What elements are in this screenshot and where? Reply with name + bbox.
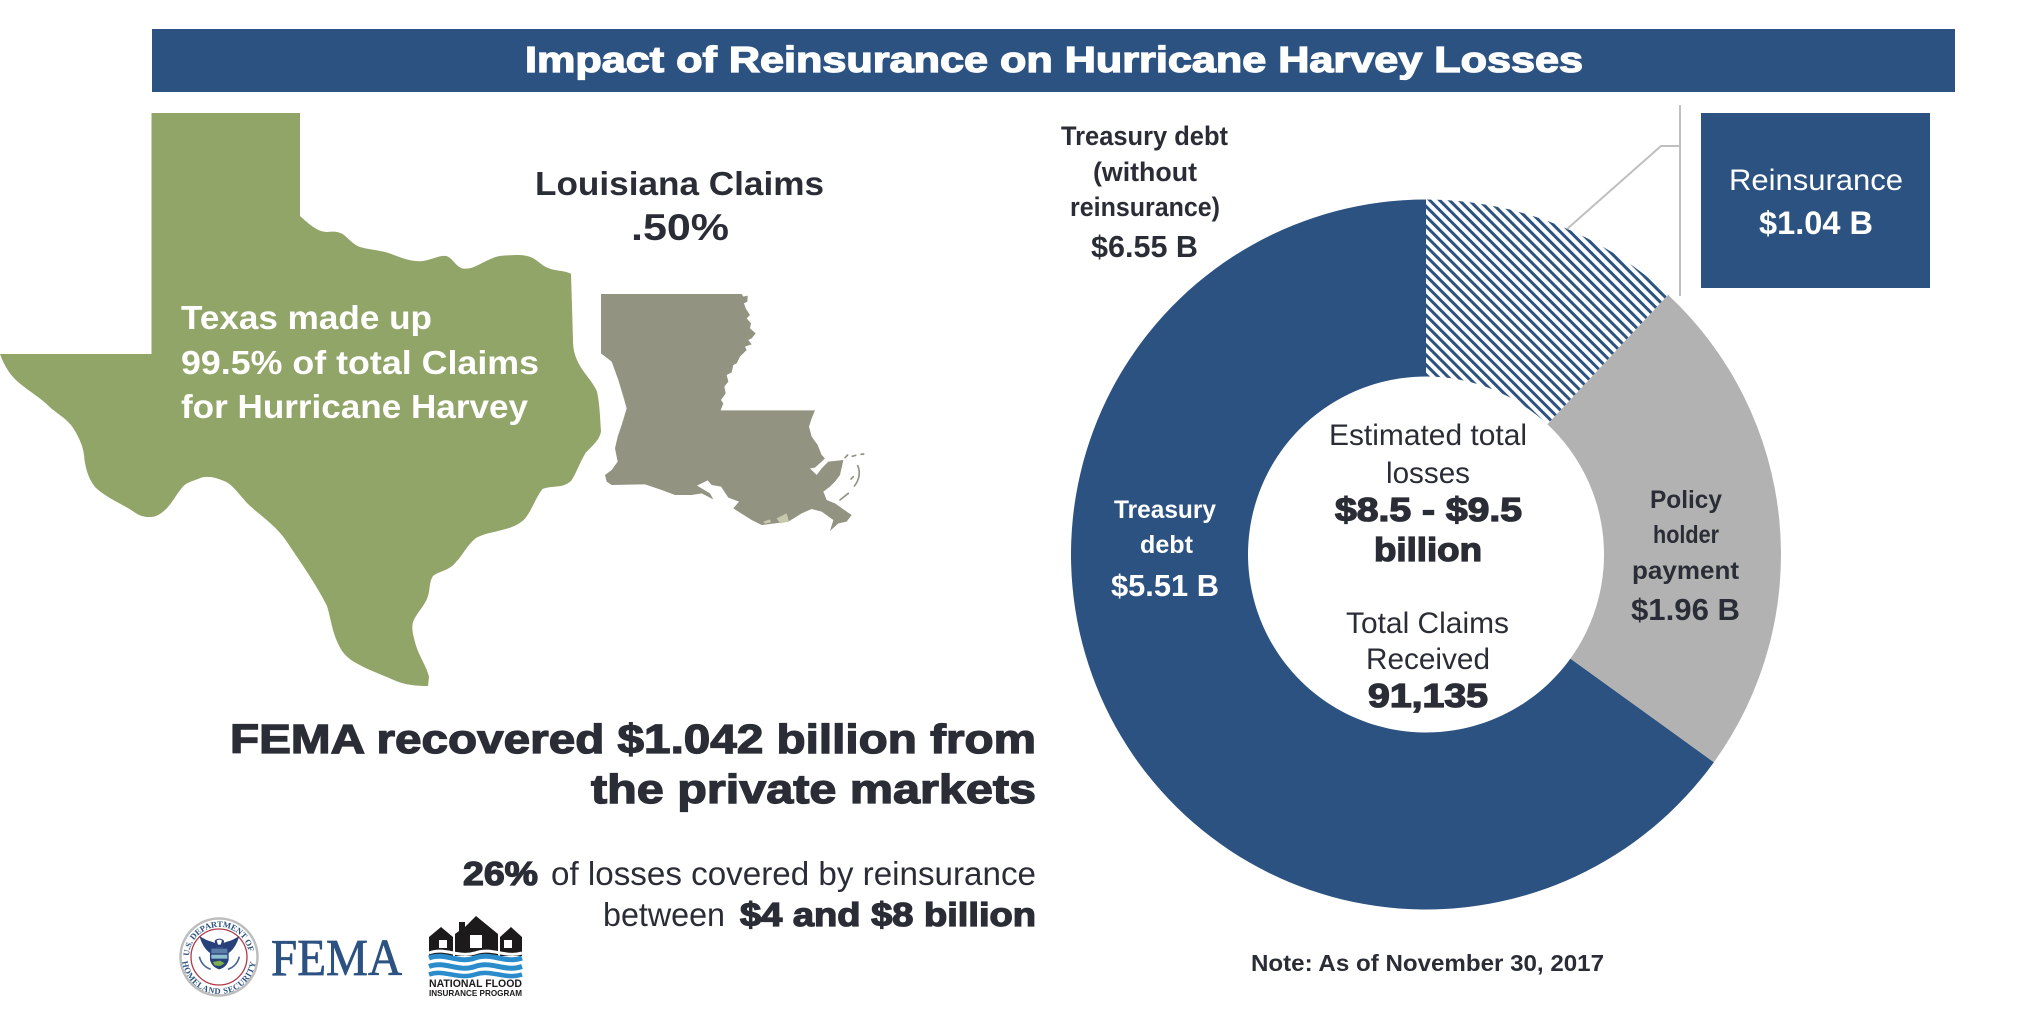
logo: National Flood Insurance Program: INSURANCE PROGRAM [429,988,522,998]
label: policy holder payment: Policy [1650,486,1722,514]
headline: FEMA recovered [230,716,1036,812]
segment: treasury debt [1071,200,1714,909]
label: policy holder payment: $1.96 B [1631,592,1740,627]
Louisiana barrier islands [840,454,864,500]
label: policy holder payment: holder [1653,521,1719,549]
donut chart [1071,200,1781,909]
Louisiana marsh patches [763,513,789,524]
donut centre: total claims [1346,607,1509,714]
logo: DHS seal [179,917,259,997]
label: treasury debt [1111,496,1219,603]
reinsurance coverage text: of losses covered by reinsurance [551,855,1036,892]
donut centre: total claims: Received [1366,643,1490,676]
label: treasury debt without reinsurance: Treasury debt [1061,121,1228,151]
Texas label [181,299,539,425]
label: treasury debt: debt [1140,531,1194,559]
leader line to reinsurance box [1567,146,1680,229]
Louisiana claims label: .50% [631,207,729,248]
label: policy holder payment [1631,486,1740,627]
headline: FEMA recovered: the private markets [591,766,1036,812]
segment: reinsurance hatched [1426,200,1668,424]
donut centre: estimated losses: losses [1386,457,1470,490]
segment: policy holder payment [1547,295,1781,762]
donut centre: total claims: Total Claims [1346,607,1509,640]
logo: DHS seal: U.S. DEPARTMENT OF [183,921,254,956]
reinsurance coverage text: between [603,896,725,933]
label: treasury debt: Treasury [1114,496,1216,524]
Louisiana claims label: Louisiana Claims [535,165,824,202]
waves [429,951,522,954]
reinsurance coverage text [463,855,1036,933]
reinsurance coverage text: $4 and $8 billion [740,896,1036,933]
donut centre: estimated losses: billion [1374,531,1482,568]
map: Texas [0,113,601,686]
donut centre: estimated losses: Estimated total [1329,419,1527,452]
label: treasury debt: $5.51 B [1111,568,1219,603]
label: policy holder payment: payment [1632,557,1740,585]
map: Louisiana [601,294,864,531]
donut centre: estimated losses: $8.5 - $9.5 [1335,491,1522,528]
reinsurance box: Reinsurance [1729,164,1903,197]
Texas label: for Hurricane Harvey [181,388,529,425]
houses [429,916,522,956]
note: Note: As of November 30, 2017 [1251,950,1604,976]
logo: National Flood Insurance Program [429,916,522,998]
logo: National Flood Insurance Program: NATIONAL FLOOD [429,978,522,990]
leader divider [1679,105,1681,296]
reinsurance box: $1.04 B [1759,205,1873,241]
reinsurance box [1701,113,1930,288]
donut centre: total claims: 91,135 [1368,677,1488,714]
headline: FEMA recovered: FEMA recovered $1.042 billion from [230,716,1036,762]
label: treasury debt without reinsurance: $6.55 B [1091,229,1198,264]
reinsurance coverage text: 26% [463,855,538,892]
title banner: Impact of Reinsurance on Hurricane Harvey Losses [525,39,1583,80]
Texas label: 99.5% of total Claims [181,344,539,381]
logo: FEMA wordmark: FEMA [271,930,402,987]
Louisiana claims label [535,165,824,248]
label: treasury debt without reinsurance: (without [1093,157,1197,187]
label: treasury debt without reinsurance [1061,121,1228,264]
label: treasury debt without reinsurance: reinsurance) [1070,192,1220,222]
Texas label: Texas made up [181,299,432,336]
title banner [152,29,1955,92]
donut centre: estimated losses [1329,419,1527,568]
logo: DHS seal: HOMELAND SECURITY [182,960,256,994]
